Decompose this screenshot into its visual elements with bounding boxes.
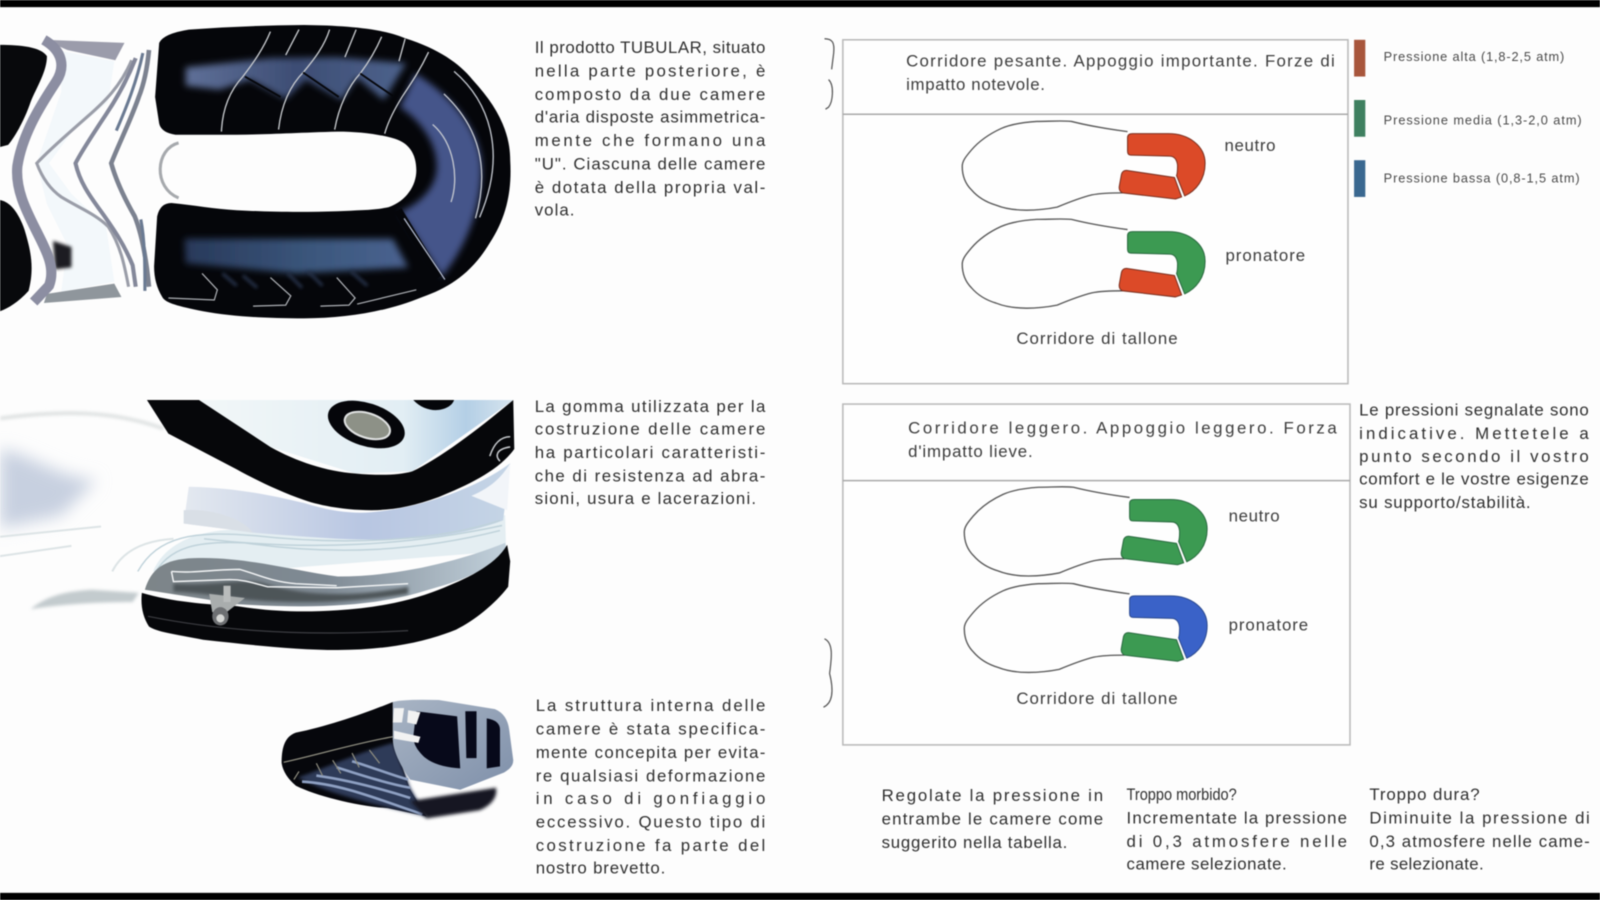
text: rubber description: ha particolari caratteristi- [535,443,765,462]
panel heading: light runner: d'impatto lieve. [908,442,1033,461]
black sole [141,545,510,650]
instruction: adjust pressure [882,786,1103,852]
text: rubber description: che di resistenza ad abra- [535,467,765,486]
instruction: adjust pressure: Regolate la pressione in [882,786,1103,805]
grey section [393,700,513,790]
panel heading: light runner [908,419,1337,461]
text: internal structure description: nostro brevetto. [536,858,665,877]
foot diagram: heavy pronator [962,219,1205,308]
panel heading: heavy runner [906,51,1335,94]
bottom black border [0,893,1600,900]
instruction: too hard [1369,785,1590,873]
text: Tubular description: mente che formano una [535,131,766,150]
instruction: too soft: di 0,3 atmosfere nelle [1127,832,1347,851]
panel heading: light runner: Corridore leggero. Appoggio leggero. Forza [908,419,1337,438]
text: rubber description: sioni, usura e lacerazioni. [535,489,756,508]
tread lines [221,30,429,134]
panel heading: heavy runner: Corridore pesante. Appoggio importante. Forze di [906,51,1335,70]
label: pronatore: pronatore [1229,616,1308,635]
text: internal structure description: La struttura interna delle [536,696,765,715]
legend item: high [1354,40,1564,77]
label: neutro: neutro [1229,506,1280,525]
top black border [0,0,1600,7]
note: indicative pressures: comfort e le vostre esigenze [1359,470,1589,489]
blue curved band [400,73,482,277]
eyelet [322,392,411,457]
panel: light runner [843,404,1350,745]
text: internal structure description [536,696,765,877]
note: indicative pressures: su supporto/stabilità. [1359,493,1531,512]
small eyelet [413,400,454,410]
instruction: too hard: re selezionate. [1369,854,1484,873]
text: Tubular description: vola. [535,200,574,219]
black collar band [147,400,514,510]
text: internal structure description: costruzione fa parte del [536,836,765,855]
foot diagram: light neutral [964,487,1207,576]
instruction: too soft [1127,785,1347,873]
text: internal structure description: in caso di gonfiaggio [536,789,765,808]
text: Tubular description: d'aria disposte asimmetrica- [535,107,765,126]
midsole [184,463,510,540]
valve [209,586,245,626]
instruction: too soft: Troppo morbido? [1127,785,1237,804]
legend item: low [1354,160,1580,197]
stripes band [153,515,506,571]
text: internal structure description: mente concepita per evita- [536,743,765,762]
illustration: chamber cross-section [282,700,513,818]
note: indicative pressures [1359,400,1589,512]
text: Tubular description: nella parte posteriore, è [535,62,765,81]
text: internal structure description: camere è stata specifica- [536,720,765,739]
text: Tubular description: composto da due camere [535,85,765,104]
caption: heel runner: Corridore di tallone [1016,329,1178,348]
text: internal structure description: eccessivo. Questo tipo di [536,813,765,832]
air chamber [145,543,507,606]
text: rubber description: costruzione delle camere [535,420,765,439]
legend: pressure levels [1354,40,1582,197]
text: rubber description: La gomma utilizzata per la [535,397,766,416]
text: rubber description [535,397,766,508]
label: neutro: neutro [1224,136,1276,155]
legend item: medium [1354,100,1582,137]
caption: heel runner: Corridore di tallone [1016,689,1178,708]
illustration: sole with U-shaped air chambers, top view [0,25,511,318]
instruction: too soft: camere selezionate. [1127,854,1287,873]
label: pronatore: pronatore [1226,246,1305,265]
text: Tubular description: Il prodotto TUBULAR, situato [535,38,765,57]
instruction: too hard: Troppo dura? [1369,785,1480,804]
note: indicative pressures: Le pressioni segnalate sono [1359,400,1589,419]
instruction: too hard: 0,3 atmosfere nelle came- [1369,832,1590,851]
text: Tubular description: "U". Ciascuna delle camere [535,154,765,173]
text: Tubular description: è dotata della propria val- [535,178,765,197]
note: indicative pressures: indicative. Mettetele a [1359,424,1589,443]
panel heading: heavy runner: impatto notevole. [906,75,1045,94]
legend item: low: Pressione bassa (0,8-1,5 atm) [1384,171,1580,186]
black U air chamber [154,25,511,318]
blue upper arm [186,57,406,100]
upper [199,400,513,473]
legend item: high: Pressione alta (1,8-2,5 atm) [1384,49,1564,64]
note: indicative pressures: punto secondo il vostro [1359,447,1589,466]
bracket mark top [824,39,834,109]
foot diagram: light pronator [964,583,1207,672]
foot diagram: heavy neutral [962,121,1205,210]
bracket mark bottom [823,639,832,707]
text: Tubular description [535,38,766,219]
instruction: too soft: Incrementate la pressione [1127,808,1347,827]
panel: heavy runner [843,40,1348,384]
illustration: heel side view with air chamber [0,392,514,650]
legend item: medium: Pressione media (1,3-2,0 atm) [1384,112,1582,127]
instruction: too hard: Diminuite la pressione di [1369,808,1590,827]
text: internal structure description: re qualsiasi deformazione [536,767,765,786]
blue lower arm [185,239,408,273]
instruction: adjust pressure: entrambe le camere come [882,809,1103,828]
instruction: adjust pressure: suggerito nella tabella. [882,833,1067,852]
